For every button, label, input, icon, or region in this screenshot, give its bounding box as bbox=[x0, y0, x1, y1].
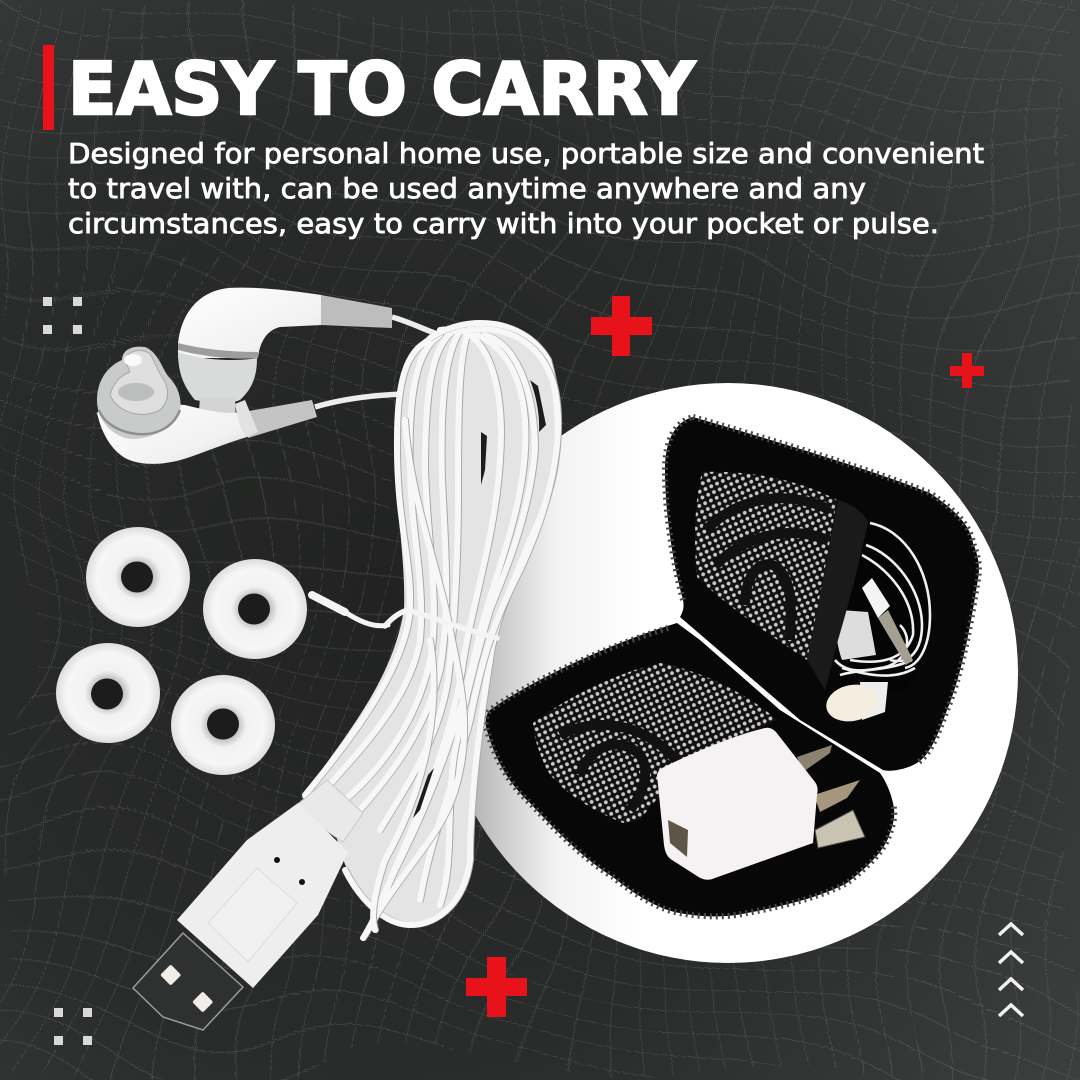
title: EASY TO CARRY bbox=[68, 47, 696, 131]
stowed earbuds bbox=[836, 610, 876, 660]
decorative dots bottom left bbox=[54, 1008, 92, 1045]
cable gaps bbox=[413, 380, 546, 818]
decorative dots top left bbox=[43, 297, 82, 334]
upper mesh pocket bbox=[695, 472, 837, 660]
ear tip 2 bbox=[203, 559, 307, 659]
dark wires behind mesh bbox=[706, 498, 830, 640]
lower earbud bbox=[97, 400, 317, 464]
lower mesh pocket bbox=[533, 663, 777, 823]
recessed panel bbox=[208, 868, 297, 962]
description text: circumstances, easy to carry with into your pocket or pulse. bbox=[68, 207, 939, 240]
earphone wires bbox=[315, 317, 440, 407]
white circle behind case bbox=[438, 383, 1018, 963]
ear tip 3 bbox=[56, 643, 160, 743]
cable bundle base bbox=[302, 324, 561, 925]
metal plug bbox=[133, 933, 243, 1030]
ear tip 4 bbox=[171, 675, 275, 775]
audio jack bbox=[862, 578, 913, 665]
case upper lid bbox=[665, 417, 979, 771]
earbud in case bbox=[823, 680, 888, 726]
cable tie and twist bbox=[312, 595, 497, 638]
earphones bbox=[97, 288, 440, 464]
usb tip in case bbox=[815, 810, 865, 848]
dark wires behind lower mesh bbox=[560, 725, 680, 810]
red plus icon right bbox=[950, 353, 984, 388]
usb cable coil bbox=[302, 323, 561, 938]
description text bbox=[68, 137, 984, 240]
plug prongs bbox=[797, 745, 860, 812]
white charger cube bbox=[657, 728, 818, 880]
upper earbud bbox=[178, 288, 392, 430]
lower earbud silicone tip bbox=[97, 347, 180, 439]
chevrons up icon bbox=[999, 924, 1023, 1016]
description text: to travel with, can be used anytime anywhere and any bbox=[68, 172, 866, 205]
coiled earphones bbox=[835, 523, 930, 676]
title accent bar bbox=[43, 45, 54, 130]
earphones pocket bbox=[839, 522, 930, 690]
silicone ear tips bbox=[56, 527, 307, 775]
description text: Designed for personal home use, portable size and convenient bbox=[68, 137, 984, 170]
red plus icon top bbox=[591, 296, 652, 356]
ear tip 1 bbox=[86, 527, 190, 627]
elastic band bbox=[807, 500, 868, 690]
strain relief bbox=[293, 780, 363, 842]
usb connector bbox=[133, 780, 363, 1030]
plug body bbox=[177, 803, 348, 988]
cable strands bbox=[305, 323, 558, 938]
zipper case bbox=[486, 417, 979, 916]
red plus icon bottom bbox=[466, 957, 527, 1017]
case lower tray bbox=[486, 623, 894, 916]
